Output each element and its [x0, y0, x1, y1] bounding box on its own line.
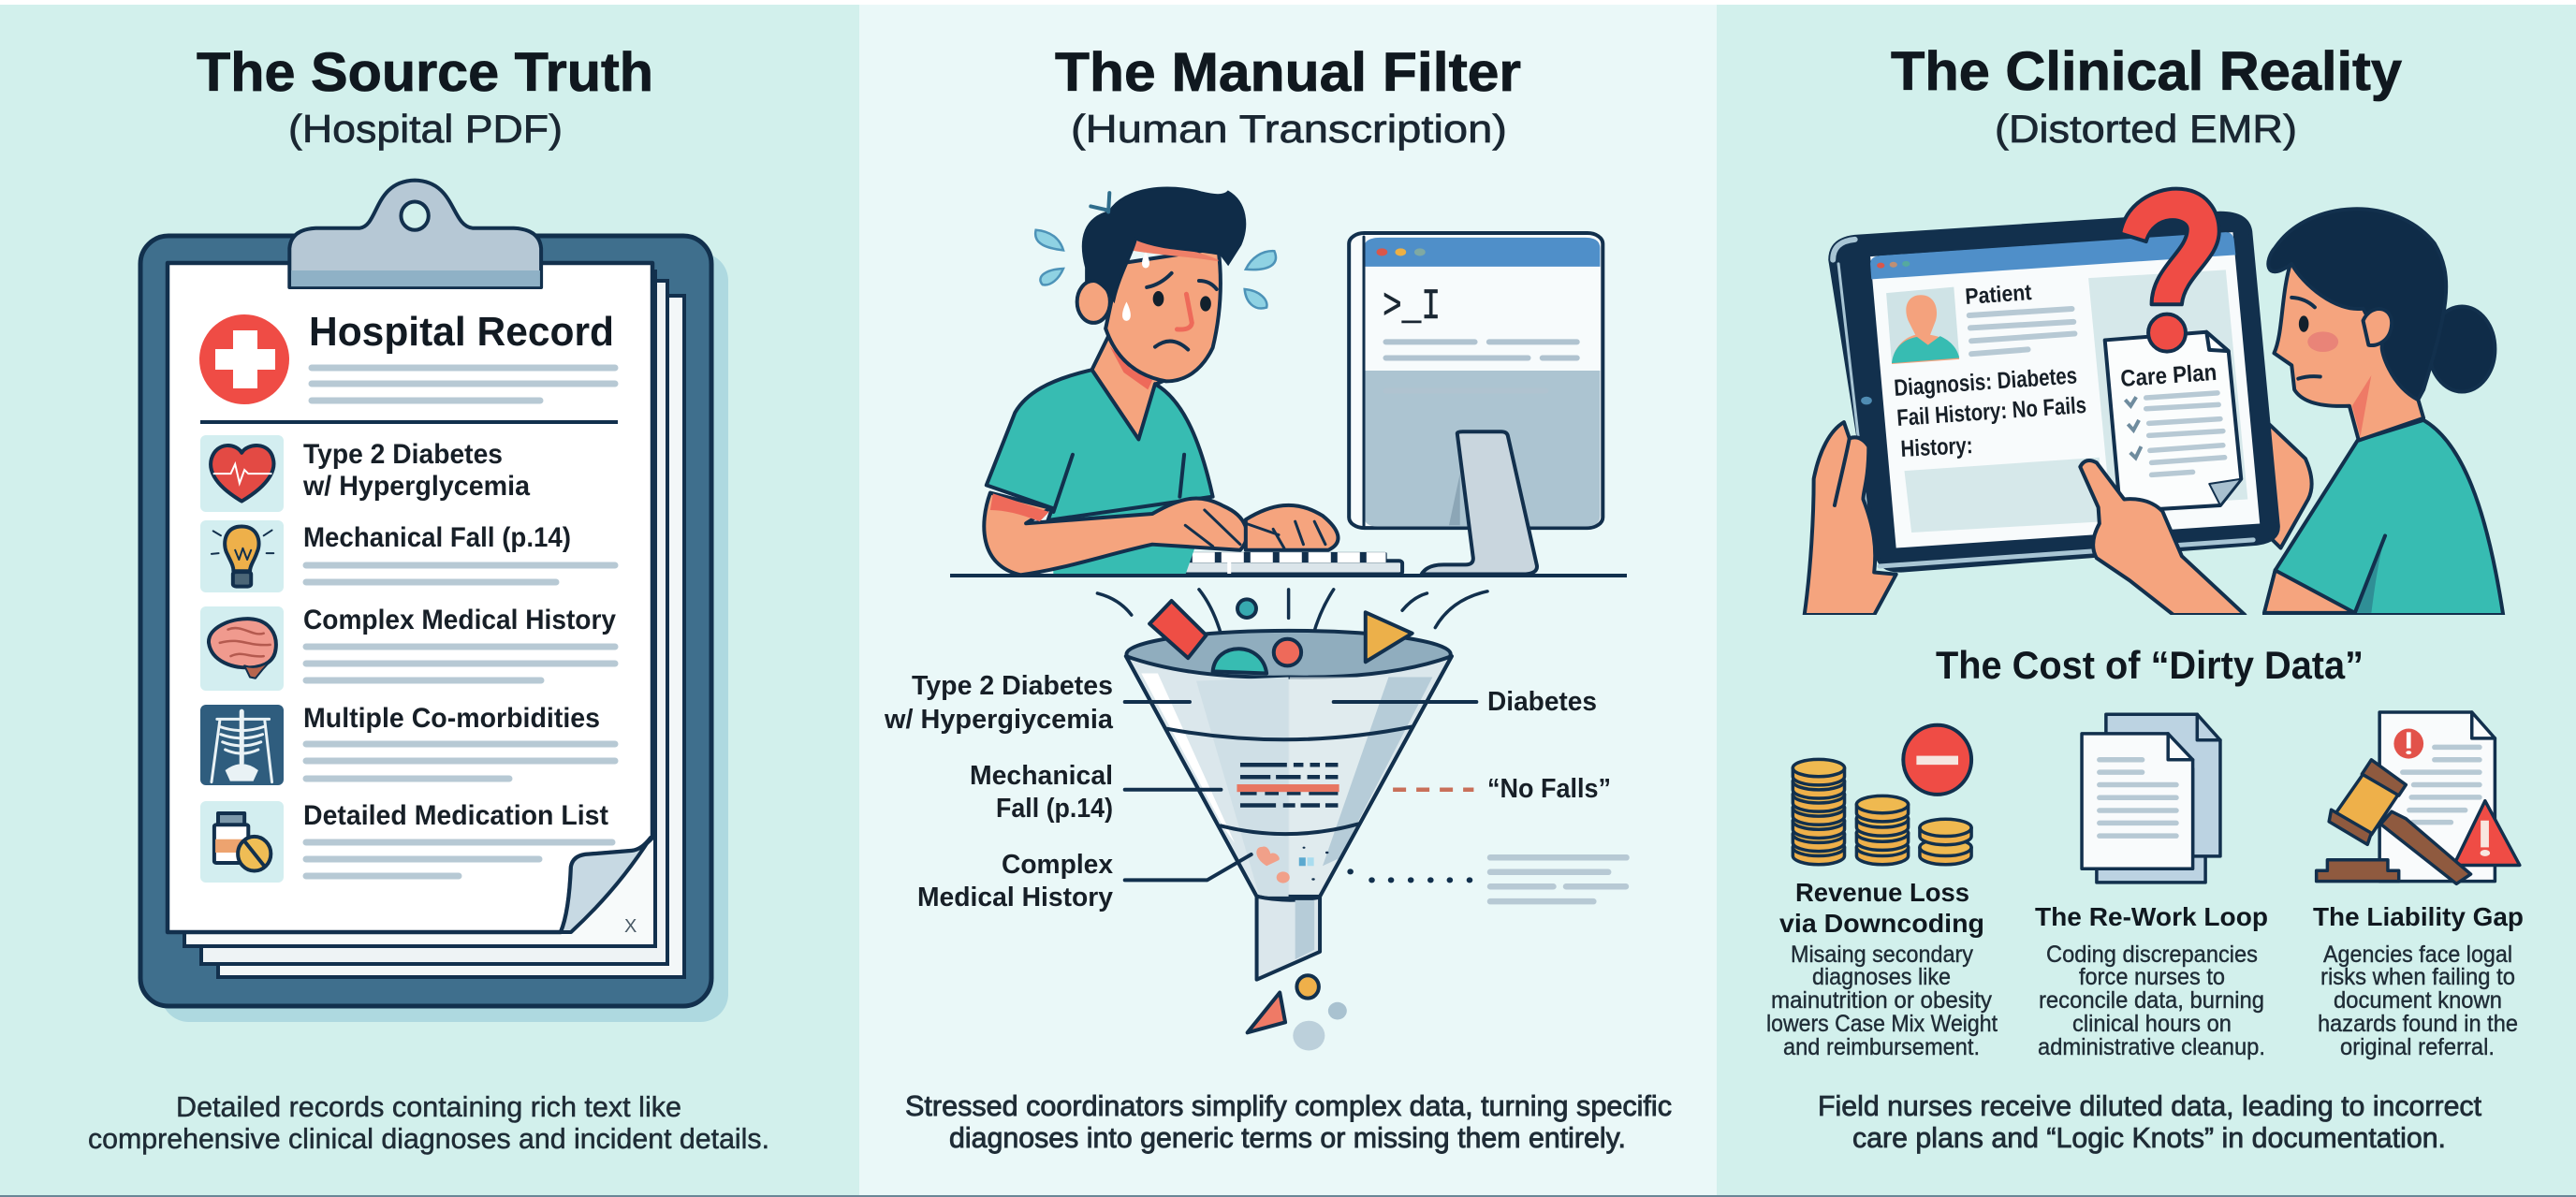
illustration: nurse with tablet	[1805, 189, 2503, 615]
falling shapes	[1149, 599, 1412, 673]
hair	[1083, 188, 1245, 299]
care plan checks	[2125, 397, 2141, 458]
tablet text	[1893, 280, 2217, 462]
funnel labels: Type 2 Diabetes	[912, 671, 1113, 701]
cost card: liability gap: hazards found in the	[2318, 1011, 2518, 1037]
sweat on face	[1122, 252, 1149, 321]
cost card: revenue loss: and reimbursement.	[1783, 1034, 1980, 1060]
illustration: stressed coordinator at computer	[984, 188, 1603, 575]
caption: panel 1	[88, 1090, 769, 1155]
cost card: re-work loop: reconcile data, burning	[2039, 987, 2264, 1014]
cost card: re-work loop: force nurses to	[2079, 964, 2225, 990]
funnel labels: Medical History	[917, 883, 1113, 912]
subtitle: Human Transcription: (Human Transcription)	[1071, 107, 1507, 151]
dashed no falls line	[1393, 788, 1473, 792]
funnel labels: Mechanical	[970, 761, 1113, 791]
cost card: revenue loss: via Downcoding	[1779, 909, 1984, 938]
blurred text lines	[1490, 857, 1627, 901]
icon: brain	[209, 619, 276, 679]
icon: light bulb	[212, 526, 273, 587]
nurse hair and bun	[2268, 209, 2495, 400]
heading lines	[312, 368, 615, 401]
garbled text in funnel	[1237, 765, 1339, 805]
caption: panel 1: Detailed records containing rich text like	[176, 1090, 681, 1123]
tablet text: Care Plan	[2119, 359, 2217, 392]
cost card: revenue loss: Revenue Loss	[1795, 878, 1969, 907]
cost card: re-work loop: administrative cleanup.	[2038, 1034, 2265, 1060]
nurse body	[2264, 420, 2503, 615]
panel: manual filter	[859, 5, 1717, 1195]
face	[1105, 248, 1221, 381]
cost card: liability gap: document known	[2334, 987, 2502, 1014]
keyboard	[1144, 552, 1402, 575]
caption: panel 2	[905, 1089, 1672, 1154]
clipboard clip	[289, 181, 541, 287]
residue in funnel	[1256, 847, 1328, 883]
tablet	[1830, 213, 2278, 571]
leader lines	[1125, 702, 1476, 880]
eyes, brows, nose, mouth	[1147, 273, 1217, 350]
funnel cone	[1126, 656, 1452, 897]
icon: heart	[211, 445, 273, 502]
cost card: re-work loop: Coding discrepancies	[2046, 942, 2258, 968]
subtitle: Hospital PDF: (Hospital PDF)	[288, 107, 563, 151]
teal shirt	[987, 370, 1213, 520]
icon: red cross	[199, 314, 289, 404]
record row: medication list	[200, 800, 612, 883]
cost card: revenue loss: lowers Case Mix Weight	[1766, 1011, 1998, 1037]
terminal prompt: >_I	[1383, 283, 1441, 331]
icon: x-ray skeleton	[212, 711, 272, 782]
patient card	[1886, 287, 1959, 363]
left hand holding tablet	[1805, 422, 1896, 615]
tablet screen	[1870, 232, 2260, 547]
funnel labels: Diabetes	[1487, 687, 1597, 717]
caption: panel 3: care plans and “Logic Knots” in documentation.	[1852, 1121, 2446, 1154]
main record sheet	[168, 263, 652, 932]
record row: medical history	[200, 605, 616, 691]
tablet title bar	[1870, 232, 2235, 279]
cost card: liability gap: risks when failing to	[2320, 964, 2515, 990]
clipboard board	[140, 236, 711, 1006]
funnel labels: Fall (p.14)	[996, 794, 1113, 824]
label: medication list: Detailed Medication List	[303, 800, 608, 831]
label: hyperglycemia: w/ Hyperglycemia	[302, 471, 530, 502]
neck	[1091, 336, 1175, 439]
title: The Source Truth: The Source Truth	[197, 42, 653, 103]
monitor stand	[1422, 431, 1537, 575]
question mark	[2120, 189, 2219, 352]
sweat drops	[1035, 230, 1276, 309]
cost icons	[1793, 712, 2520, 883]
cost card: liability gap	[2313, 902, 2524, 1060]
ear	[1077, 281, 1110, 323]
subtitle: Distorted EMR: (Distorted EMR)	[1995, 107, 2297, 151]
record row: diabetes	[200, 435, 530, 512]
cost card: re-work loop: clinical hours on	[2072, 1011, 2232, 1037]
right hand	[1246, 505, 1338, 550]
label: mechanical fall: Mechanical Fall (p.14)	[303, 522, 571, 553]
label: multiple co-morbidities: Multiple Co-morbidities	[303, 703, 600, 734]
spark lines	[1097, 590, 1487, 636]
icon: minus badge	[1903, 725, 1971, 795]
caption: panel 3: Field nurses receive diluted data, leading to incorrect	[1818, 1089, 2481, 1122]
caption: panel 2: diagnoses into generic terms or missing them entirely.	[949, 1121, 1626, 1154]
cost card: re-work loop: The Re-Work Loop	[2035, 902, 2268, 931]
tablet text: Patient	[1965, 280, 2032, 310]
corner mark: X	[624, 916, 637, 937]
funnel rim back	[1126, 631, 1451, 678]
cost card: re-work loop	[2035, 902, 2268, 1060]
side panels	[2088, 270, 2247, 507]
nurse neck and face	[2274, 260, 2423, 441]
tablet text: Fail History: No Fails	[1895, 392, 2087, 431]
cost card: revenue loss: diagnoses like	[1812, 964, 1951, 990]
cost card: liability gap: The Liability Gap	[2313, 902, 2524, 931]
icon: gavel and warning	[2317, 712, 2520, 883]
left arm and hand	[984, 493, 1247, 575]
patient lines	[1969, 309, 2074, 354]
caption: panel 3	[1818, 1089, 2481, 1154]
icon: coin stacks	[1793, 759, 1971, 865]
cost card: revenue loss: mainutrition or obesity	[1771, 987, 1992, 1014]
funnel labels	[884, 671, 1611, 912]
back sheets	[184, 271, 684, 977]
label: type 2 diabetes: Type 2 Diabetes	[303, 439, 503, 470]
heading: The Cost of Dirty Data: The Cost of “Dirty Data”	[1936, 643, 2364, 687]
heading: Hospital Record: Hospital Record	[309, 309, 614, 355]
page curl	[561, 838, 651, 932]
cost card: liability gap: original referral.	[2340, 1034, 2495, 1060]
funnel bands	[1166, 727, 1412, 900]
clipboard shadow	[161, 253, 728, 1022]
label: complex medical history: Complex Medical History	[303, 605, 616, 635]
record row: co-morbidities	[200, 703, 615, 785]
panel: clinical reality	[1717, 5, 2576, 1195]
tablet text: History:	[1900, 432, 1973, 462]
record row: mechanical fall	[200, 520, 615, 592]
icon: documents	[2082, 714, 2220, 883]
torso	[1050, 497, 1213, 575]
title: The Manual Filter: The Manual Filter	[1055, 42, 1521, 103]
clipboard illustration	[140, 181, 728, 1022]
cost card: revenue loss	[1766, 878, 1998, 1060]
icon: pill bottle	[214, 813, 271, 871]
caption: panel 1: comprehensive clinical diagnoses and incident details.	[88, 1122, 769, 1155]
dotted line	[1350, 871, 1470, 880]
pointing hand	[2080, 460, 2245, 615]
caption: panel 2: Stressed coordinators simplify complex data, turning specific	[905, 1089, 1672, 1122]
nurse right hand on tablet	[2270, 423, 2314, 550]
funnel spout	[1257, 897, 1320, 980]
desk	[950, 574, 1627, 577]
panel: source truth	[0, 5, 859, 1195]
funnel labels: “No Falls”	[1487, 774, 1611, 804]
illustration: funnel	[1097, 590, 1627, 1050]
output shapes	[1248, 975, 1347, 1050]
computer monitor	[1349, 233, 1603, 528]
care plan paper	[2105, 332, 2241, 511]
funnel labels: w/ Hypergiycemia	[884, 705, 1114, 735]
cost card: liability gap: Agencies face logal	[2323, 942, 2512, 968]
cost card: revenue loss: Misaing secondary	[1791, 942, 1973, 968]
title: The Clinical Reality: The Clinical Reality	[1891, 41, 2402, 102]
tablet text: Diagnosis: Diabetes	[1893, 362, 2078, 401]
funnel labels: Complex	[1002, 850, 1113, 880]
nurse ear, eye, brow, mouth	[2291, 298, 2392, 379]
